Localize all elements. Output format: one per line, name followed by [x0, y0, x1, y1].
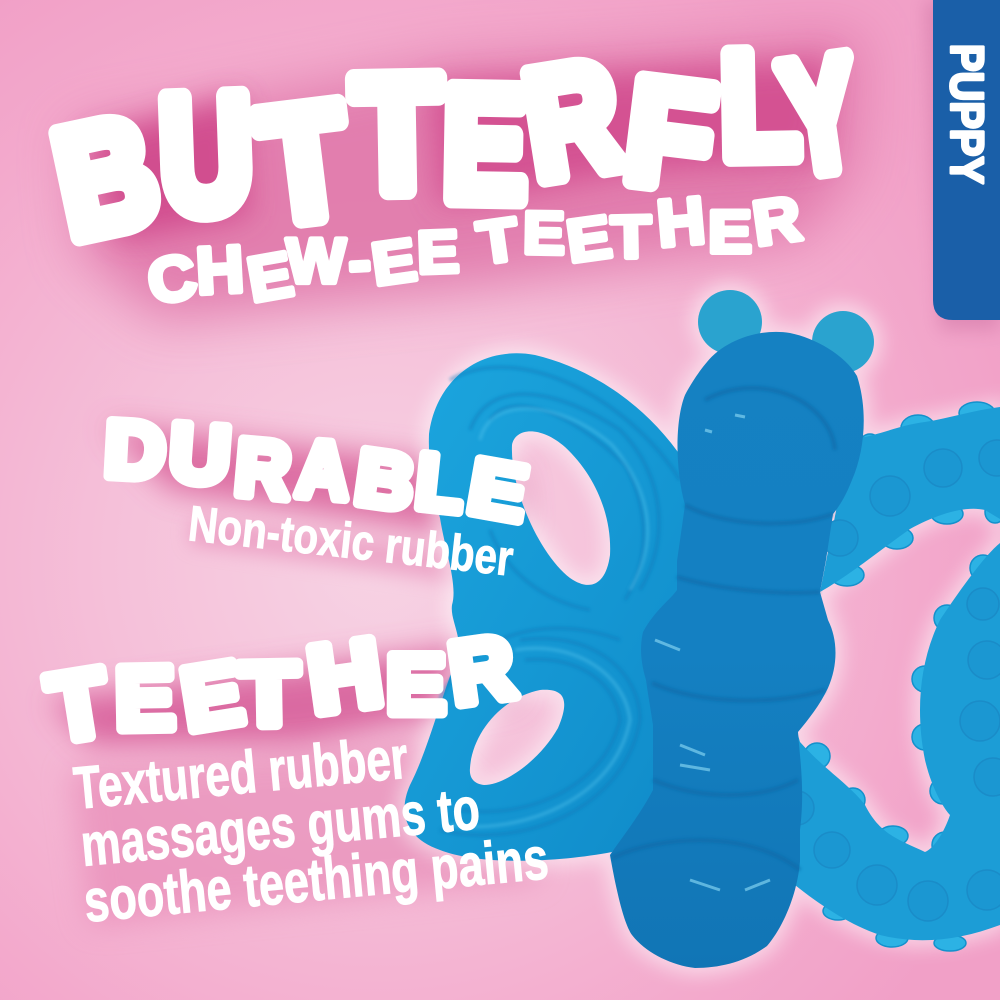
title: BUTTERFLY: E — [442, 55, 528, 234]
heading: teether — [41, 617, 520, 761]
subtitle: CHEW-EE TEETHER: E — [416, 218, 460, 287]
subtitle: CHEW-EE TEETHER: W — [286, 227, 346, 297]
heading: durable: L — [412, 436, 468, 529]
puppy tab shadow — [925, 0, 1000, 330]
title: BUTTERFLY: L — [719, 20, 801, 190]
heading: teether: E — [115, 648, 175, 748]
heading: teether: E — [175, 642, 249, 749]
heading: teether: E — [387, 638, 445, 732]
text: textured rubber: soothe teething pains — [81, 824, 551, 935]
subtitle: CHEW-EE TEETHER: E — [242, 239, 298, 315]
subtitle: CHEW-EE TEETHER: E — [368, 226, 421, 299]
toy halo — [405, 290, 1000, 968]
heading: durable — [103, 404, 533, 538]
left wing highlights — [450, 409, 648, 827]
title: BUTTERFLY: T — [251, 69, 357, 257]
body segment lines — [612, 388, 835, 870]
title glow — [70, 35, 860, 320]
title: BUTTERFLY: T — [352, 43, 442, 226]
right wings — [780, 402, 1000, 951]
puppy label: PUPPY — [941, 44, 993, 184]
subtitle: CHEW-EE TEETHER: H — [194, 231, 246, 308]
title: BUTTERFLY: F — [618, 48, 722, 221]
text: non-toxic rubber: Non-toxic rubber — [186, 495, 516, 587]
subtitle: CHEW-EE TEETHER: E — [522, 199, 566, 268]
title: BUTTERFLY: Y — [771, 23, 869, 207]
subtitle: CHEW-EE TEETHER: C — [142, 240, 202, 318]
title: BUTTERFLY: B — [41, 84, 171, 271]
text: textured rubber — [71, 724, 551, 935]
right wing domes — [780, 440, 1000, 921]
title: BUTTERFLY: U — [157, 61, 255, 248]
durable glow — [105, 425, 525, 530]
subtitle: CHEW-EE TEETHER: H — [654, 183, 708, 260]
title: BUTTERFLY — [41, 20, 869, 271]
subtitle: CHEW-EE TEETHER — [142, 183, 805, 318]
heading: teether: H — [302, 620, 388, 733]
subtitle: CHEW-EE TEETHER: E — [563, 203, 616, 276]
subtitle: CHEW-EE TEETHER: T — [473, 206, 523, 277]
text: textured rubber: Textured rubber — [71, 724, 411, 822]
puppy tab — [933, 0, 1000, 320]
heading: durable: U — [167, 406, 233, 502]
heading: durable: D — [103, 404, 167, 496]
heading: durable: E — [462, 443, 533, 538]
body — [610, 332, 864, 968]
heading: durable: R — [232, 421, 294, 516]
left wings — [405, 353, 700, 861]
subtitle: CHEW-EE TEETHER: T — [610, 204, 652, 271]
teether glow — [50, 640, 520, 745]
subtitle: CHEW-EE TEETHER: - — [347, 226, 372, 297]
subtitle: CHEW-EE TEETHER: R — [749, 183, 805, 259]
non-toxic glow — [190, 520, 510, 590]
heading: durable: A — [294, 424, 352, 517]
title: BUTTERFLY: R — [514, 28, 632, 212]
left wing ridges — [440, 367, 680, 835]
heading: teether: R — [444, 617, 520, 723]
body highlights — [655, 415, 770, 890]
heading: teether: T — [239, 644, 299, 744]
ears — [698, 290, 874, 373]
subtitle: CHEW-EE TEETHER: E — [708, 199, 752, 266]
right wing bumps — [804, 402, 1000, 951]
heading: teether: T — [41, 649, 115, 761]
text: textured rubber: massages gums to — [78, 775, 482, 879]
heading: durable: B — [350, 432, 420, 527]
teether text glow — [70, 740, 540, 925]
butterfly toy — [405, 290, 1000, 968]
